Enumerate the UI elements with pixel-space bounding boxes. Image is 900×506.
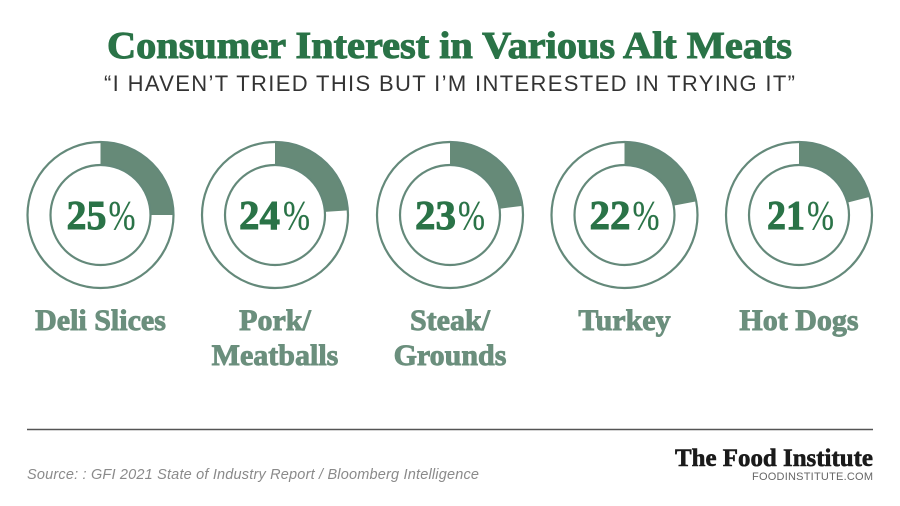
donut: hot dogs 21%: % — [807, 192, 834, 238]
donut: deli slices 25%: 25 — [66, 192, 106, 238]
donut: turkey 22%: 22 — [590, 192, 630, 238]
label: turkey: Turkey — [578, 304, 671, 337]
label: steak/grounds: Steak/ — [410, 304, 490, 337]
donut: deli slices 25% — [28, 142, 174, 288]
donut: pork/meatballs 24% — [202, 142, 348, 288]
donut: deli slices 25%: % — [108, 192, 136, 238]
donut: turkey 22%: % — [632, 192, 660, 238]
donut: steak/grounds 23%: 23 — [415, 192, 456, 238]
label: pork/meatballs: Pork/ — [239, 304, 311, 337]
donut: pork/meatballs 24%: 24 — [239, 192, 280, 238]
logo: the food institute: The Food Institute — [675, 445, 873, 472]
label: steak/grounds: Grounds — [394, 339, 506, 372]
donut: steak/grounds 23%: % — [458, 192, 485, 238]
title: Consumer Interest in Various Alt Meats — [107, 25, 792, 67]
donut: steak/grounds 23% — [377, 142, 523, 288]
subtitle: “I HAVEN’T TRIED THIS BUT I’M INTERESTED IN TRYING IT” — [104, 71, 795, 96]
donut: turkey 22% — [552, 142, 698, 288]
donut: hot dogs 21%: 21 — [767, 192, 805, 238]
source note: Source: : GFI 2021 State of Industry Report / Bloomberg Intelligence — [27, 467, 479, 483]
donut: hot dogs 21% — [726, 142, 872, 288]
label: pork/meatballs: Meatballs — [212, 339, 338, 372]
donut: pork/meatballs 24%: % — [283, 192, 310, 238]
label: deli slices: Deli Slices — [35, 304, 166, 337]
logo: the food institute: FOODINSTITUTE.COM — [752, 471, 873, 483]
label: hot dogs: Hot Dogs — [739, 304, 859, 337]
